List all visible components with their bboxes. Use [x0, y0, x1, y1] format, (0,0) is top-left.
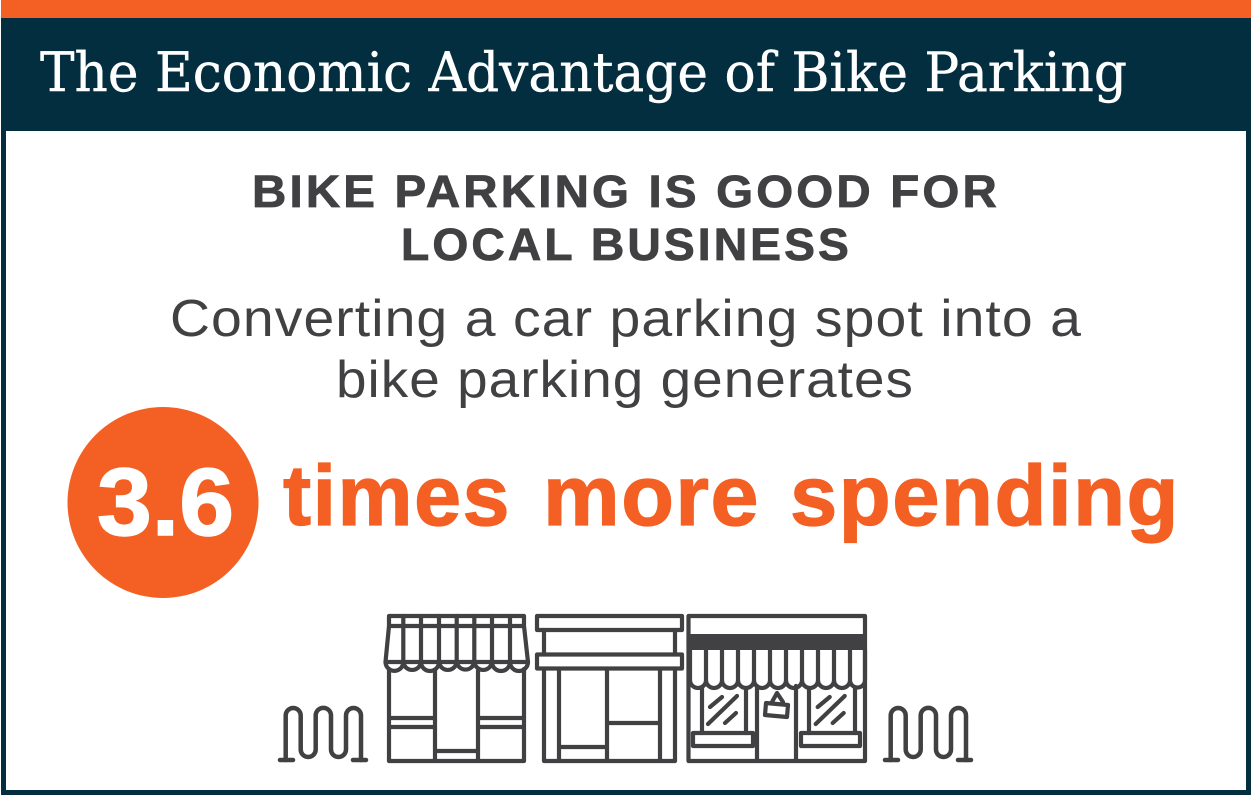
body text: Converting a car parking spot into a	[170, 290, 1082, 348]
stat text: times	[283, 449, 511, 544]
title: The Economic Advantage of Bike Parking	[40, 41, 1127, 104]
icon: left bike rack	[280, 708, 366, 760]
icon: shop with striped awning	[386, 616, 528, 761]
icon: right bike rack	[885, 708, 971, 760]
heading: LOCAL BUSINESS	[401, 219, 852, 270]
stat badge: 3.6	[68, 407, 258, 598]
stat badge: 3.6: 3.6	[97, 449, 234, 556]
stat text: more	[543, 449, 760, 544]
stat text: spending	[790, 449, 1180, 544]
orange top bar	[1, 0, 1251, 18]
icon: shop with scalloped awning, windows and sign	[688, 616, 865, 761]
heading: BIKE PARKING IS GOOD FOR	[252, 166, 1000, 217]
stat text	[283, 449, 1180, 544]
body text: bike parking generates	[336, 351, 914, 409]
icon: shop with flat cornice	[537, 616, 682, 761]
heading	[252, 166, 1000, 270]
body text	[170, 290, 1082, 409]
illustration: street of shops and bike racks	[280, 616, 971, 761]
